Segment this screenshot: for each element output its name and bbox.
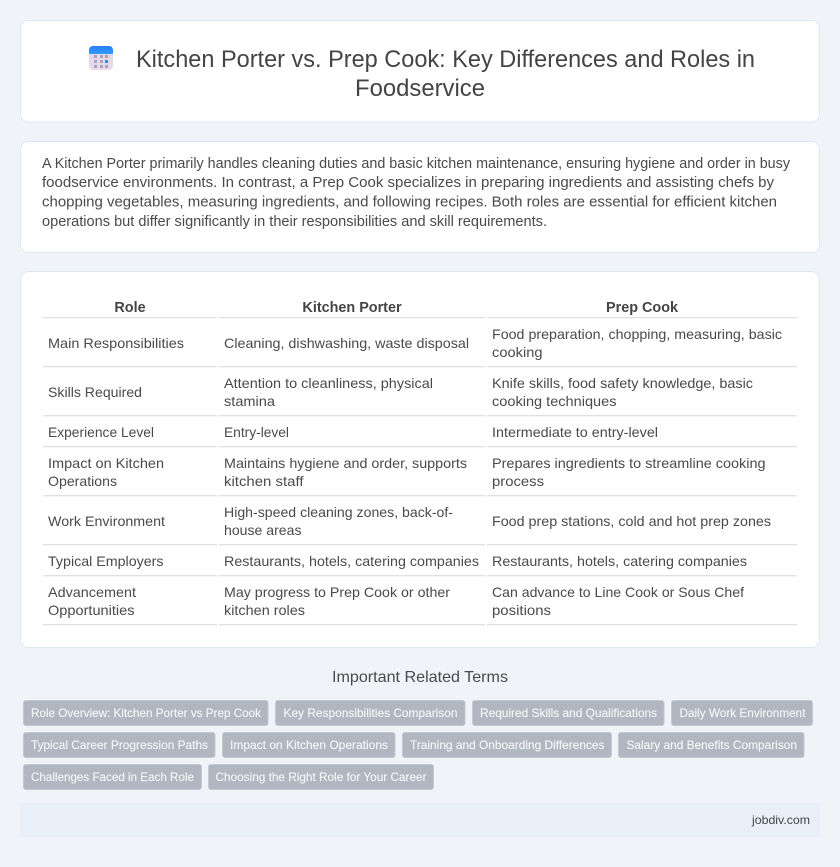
row: impact on kitchen operations: process <box>492 473 544 489</box>
row: main responsibilities: Main Responsibilities <box>48 335 184 351</box>
panel: intro text: A Kitchen Porter primarily handles cleaning duties and basic kitchen maintenance, ensuring hygiene and order in busy <box>42 156 791 172</box>
row: experience level: Entry-level <box>224 424 289 440</box>
icon: calendar <box>89 46 113 70</box>
row: experience level: Experience Level <box>48 424 154 440</box>
panel: header <box>20 20 820 122</box>
title <box>136 46 755 102</box>
row: skills required: stamina <box>224 393 275 409</box>
panel: intro text: foodservice environments. In contrast, a Prep Cook specializes in preparing ingredients and assisting chefs by <box>42 175 775 191</box>
tag list <box>24 700 812 790</box>
tag: Role Overview: Kitchen Porter vs Prep Cook <box>31 706 262 720</box>
tag: Key Responsibilities Comparison <box>284 706 458 720</box>
row: impact on kitchen operations: Prepares ingredients to streamline cooking <box>492 455 766 471</box>
row: experience level <box>43 424 797 447</box>
row: typical employers <box>43 553 797 576</box>
row: typical employers: Restaurants, hotels, catering companies <box>492 553 747 569</box>
row: main responsibilities: cooking <box>492 344 542 360</box>
panel: intro text <box>20 142 820 252</box>
row: advancement opportunities: Opportunities <box>48 602 134 618</box>
row: skills required: Skills Required <box>48 384 142 400</box>
tag <box>672 700 812 726</box>
tag: Choosing the Right Role for Your Career <box>216 770 426 784</box>
row: main responsibilities: Food preparation, chopping, measuring, basic <box>492 326 782 342</box>
panel: intro text: chopping vegetables, measuring ingredients, and following recipes. Both roles are essential for efficient kitchen <box>42 194 777 210</box>
tag <box>222 732 395 758</box>
tag <box>618 732 804 758</box>
row: advancement opportunities: Can advance to Line Cook or Sous Chef <box>492 584 744 600</box>
row: work environment <box>43 504 797 545</box>
row: advancement opportunities: Advancement <box>48 584 136 600</box>
table header: Role <box>114 300 146 316</box>
table header: Kitchen Porter <box>302 300 402 316</box>
table header <box>43 300 797 318</box>
row: work environment: house areas <box>224 522 302 538</box>
tag <box>402 732 612 758</box>
title: Foodservice <box>355 75 485 102</box>
tag: Required Skills and Qualifications <box>480 706 657 720</box>
tag: Salary and Benefits Comparison <box>626 738 797 752</box>
footer: jobdiv.com <box>751 813 810 827</box>
row: impact on kitchen operations <box>43 455 797 496</box>
row: skills required: cooking techniques <box>492 393 616 409</box>
row: typical employers: Typical Employers <box>48 553 164 569</box>
row: impact on kitchen operations: kitchen staff <box>224 473 304 489</box>
row: impact on kitchen operations: Maintains hygiene and order, supports <box>224 455 467 471</box>
heading: important related terms: Important Related Terms <box>332 669 508 686</box>
tag: Challenges Faced in Each Role <box>31 770 194 784</box>
footer <box>20 803 820 837</box>
tag <box>208 764 434 790</box>
row: impact on kitchen operations: Impact on Kitchen <box>48 455 164 471</box>
tag <box>472 700 664 726</box>
tag: Training and Onboarding Differences <box>410 738 604 752</box>
tag <box>276 700 465 726</box>
tag <box>24 732 215 758</box>
row: skills required: Knife skills, food safety knowledge, basic <box>492 375 753 391</box>
row: work environment: High-speed cleaning zones, back-of- <box>224 504 453 520</box>
row: advancement opportunities: kitchen roles <box>224 602 305 618</box>
row: main responsibilities <box>43 326 797 367</box>
tag: Typical Career Progression Paths <box>31 738 208 752</box>
row: advancement opportunities <box>43 584 797 625</box>
panel: intro text: operations but differ significantly in their responsibilities and skill requirements. <box>42 214 547 230</box>
row: skills required <box>43 375 797 416</box>
row: work environment: Work Environment <box>48 513 165 529</box>
tag <box>24 700 268 726</box>
panel: comparison table <box>20 272 820 648</box>
row: work environment: Food prep stations, cold and hot prep zones <box>492 513 771 529</box>
tag <box>24 764 202 790</box>
title: Kitchen Porter vs. Prep Cook: Key Differences and Roles in <box>136 46 755 73</box>
row: main responsibilities: Cleaning, dishwashing, waste disposal <box>224 335 469 351</box>
row: advancement opportunities: May progress to Prep Cook or other <box>224 584 450 600</box>
tag: Daily Work Environment <box>680 706 806 720</box>
table header: Prep Cook <box>606 300 679 316</box>
tag: Impact on Kitchen Operations <box>230 738 388 752</box>
row: advancement opportunities: positions <box>492 602 551 618</box>
row: typical employers: Restaurants, hotels, catering companies <box>224 553 479 569</box>
row: impact on kitchen operations: Operations <box>48 473 117 489</box>
row: skills required: Attention to cleanliness, physical <box>224 375 433 391</box>
row: experience level: Intermediate to entry-level <box>492 424 658 440</box>
